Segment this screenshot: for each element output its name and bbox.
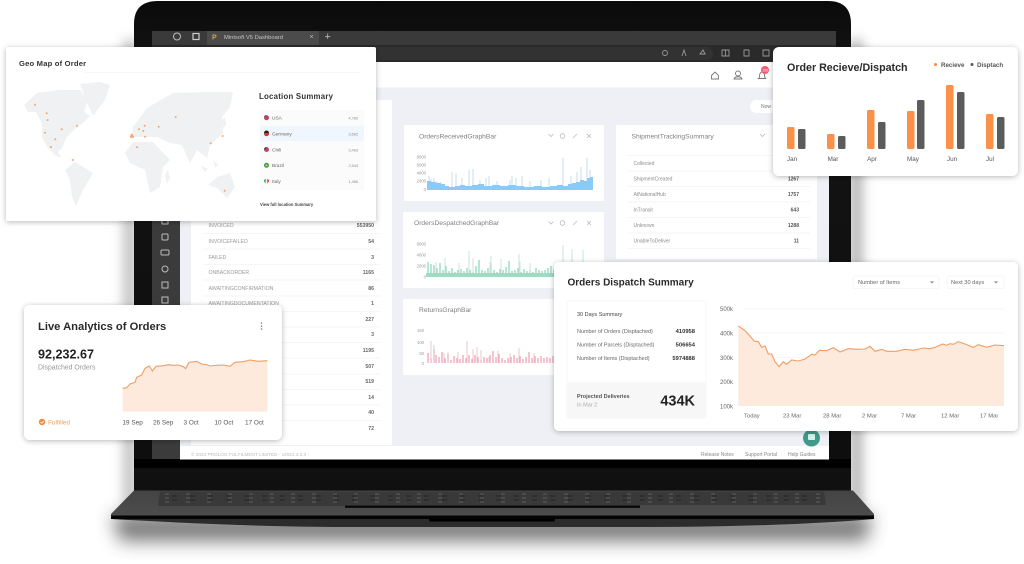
area chart: live orders: 26 Sep (153, 420, 174, 426)
line chart: dispatch forecast: 2 Mar (862, 414, 877, 420)
browser window (152, 31, 836, 460)
bar chart: orders received (427, 158, 593, 190)
area chart: live orders: 19 Sep (122, 420, 143, 426)
panel: order status table: AWAITINGDOCUMENTATION (208, 301, 279, 307)
laptop shadow (112, 40, 872, 541)
line chart: dispatch forecast: 17 Mar (980, 414, 998, 420)
summary box: Number of Parcels (Disptached) (577, 342, 655, 348)
footer: Support Portal (745, 452, 777, 458)
panel: order status table: INVOICEFAILED (208, 239, 248, 245)
bar chart: receive vs dispatch: Apr (867, 156, 877, 163)
icon: chat button (803, 430, 820, 446)
line chart: dispatch forecast (720, 307, 1004, 420)
browser tab bar: × (310, 34, 314, 41)
location summary (259, 92, 364, 207)
panel: Geo Map of Order (6, 47, 376, 221)
date pill (750, 100, 790, 113)
heading: orders dispatch summary: Orders Dispatch Summary (568, 278, 694, 288)
panel: OrdersReceivedGraphBar (404, 125, 604, 201)
line chart: dispatch forecast: 28 Mar (823, 414, 841, 420)
panel: order status table: 54 (368, 239, 374, 245)
line chart: dispatch forecast: 12 Mar (941, 414, 959, 420)
area chart: live orders: 3 Oct (184, 420, 199, 426)
summary box: Projected Deliveries (577, 394, 630, 400)
location summary: 3,592 (348, 132, 358, 136)
bar chart: receive vs dispatch (787, 85, 1004, 163)
browser tab bar: + (324, 31, 331, 43)
panel: ShipmentTrackingSummary: ShipmentCreated (634, 176, 673, 182)
line chart: dispatch forecast: 300k (720, 356, 734, 362)
panel: ShipmentTrackingSummary: InTransit (634, 208, 653, 214)
panel: order status table: ONBACKORDER (208, 270, 249, 276)
heading: geo map: Geo Map of Order (19, 59, 86, 68)
location summary: USA (272, 116, 283, 122)
location summary: 3,493 (348, 148, 358, 152)
panel: order status table: 519 (365, 379, 374, 385)
dropdown: next 30 days (947, 276, 1004, 288)
panel: order status table: INVOICED (208, 223, 234, 229)
footer (180, 446, 829, 460)
summary box: In Mar 2 (577, 402, 597, 408)
icon: home (712, 72, 718, 79)
panel: order status table: 507 (365, 364, 374, 370)
panel: Live Analytics of Orders (24, 305, 282, 440)
panel: order status table: 3 (371, 255, 374, 261)
bar chart: receive vs dispatch: Mar (828, 156, 838, 163)
browser tab bar: P (212, 34, 217, 42)
panel: ReturnsGraphBar: 150 (417, 328, 425, 333)
laptop (111, 1, 874, 541)
summary box: Number of Orders (Disptached) (577, 329, 653, 335)
dropdown: number of items (853, 276, 939, 288)
panel: OrdersReceivedGraphBar: 8000 (417, 154, 427, 160)
content background (180, 87, 829, 446)
panel: order status table: 40 (368, 410, 374, 416)
line chart: dispatch forecast: Today (744, 414, 760, 420)
laptop base deck (111, 490, 874, 527)
bar chart: receive vs dispatch: Jul (986, 156, 994, 163)
line chart: dispatch forecast: 100k (720, 404, 734, 410)
panel: ReturnsGraphBar: 50 (419, 351, 425, 356)
panel: order status table: AWAITINGCONFIRMATION (208, 286, 274, 292)
summary box (567, 301, 706, 418)
panel: OrdersDespatchedGraphBar: 4000 (417, 252, 427, 258)
panel: ShipmentTrackingSummary: 643 (791, 208, 799, 214)
panel: order status table: 86 (368, 286, 374, 292)
footer: Help Guides (788, 452, 816, 458)
panel: ShipmentTrackingSummary: UnableToDeliver (634, 238, 671, 244)
icon: bell with badge: 100 (762, 68, 768, 72)
panel: OrdersReceivedGraphBar: 2000 (417, 178, 427, 184)
icon: menu dots (261, 322, 262, 330)
icon: bell with badge (758, 66, 769, 78)
panel: order status table: 3 (371, 332, 374, 338)
location summary: Germany (272, 132, 292, 138)
panel: OrdersReceivedGraphBar: 4000 (417, 170, 427, 176)
icon: user (734, 71, 742, 79)
heading: order recieve dispatch: Order Recieve/Dispatch (787, 62, 908, 74)
panel: ShipmentTrackingSummary: Unknown (634, 223, 655, 229)
footer: © 2024 PROLOG FULFILMENT LIMITED - v2024.4.2.3 (191, 451, 307, 457)
panel: order status table: 1165 (363, 270, 374, 276)
location summary: 2,543 (348, 164, 358, 168)
metric: dispatched orders: Dispatched Orders (38, 364, 96, 372)
area chart: live orders: 17 Oct (245, 420, 264, 426)
app sidebar (152, 62, 180, 459)
bar chart: receive vs dispatch: Jan (787, 156, 798, 163)
panel: Orders Dispatch Summary (554, 262, 1018, 431)
location summary: Chili (272, 148, 281, 154)
line chart: dispatch forecast: 500k (720, 307, 734, 313)
legend (934, 62, 1003, 69)
panel: ReturnsGraphBar (403, 299, 563, 375)
panel: OrdersReceivedGraphBar: OrdersReceivedGraphBar (419, 134, 497, 140)
metric: dispatched orders (38, 348, 96, 372)
panel: ShipmentTrackingSummary: 1757 (788, 192, 799, 198)
panel: ShipmentTrackingSummary: AtNationalHub (634, 192, 666, 198)
summary box: 30 Days Summary (577, 312, 622, 318)
line chart: dispatch forecast: 7 Mar (901, 414, 916, 420)
location summary: Italy (272, 179, 281, 185)
footer: Release Notes (701, 452, 734, 458)
dropdown: number of items: Number of Items (858, 280, 900, 286)
panel: order status table: 1 (371, 301, 374, 307)
panel: ShipmentTrackingSummary: ShipmentTrackingSummary (632, 134, 714, 140)
dropdown: next 30 days: Next 30 days (951, 280, 984, 286)
panel: ReturnsGraphBar: 100 (417, 340, 425, 345)
panel: ShipmentTrackingSummary: 11 (794, 238, 799, 244)
location summary: 1,456 (348, 180, 358, 184)
panel: OrdersDespatchedGraphBar: 2000 (417, 264, 427, 268)
location summary: 4,789 (348, 116, 358, 120)
area chart: live orders (122, 360, 267, 426)
panel: order status table: 1195 (363, 348, 374, 354)
panel: OrdersReceivedGraphBar: 0 (424, 187, 427, 192)
heading: live analytics: Live Analytics of Orders (38, 321, 166, 333)
summary box: 5974888 (672, 356, 696, 362)
bar chart: receive vs dispatch: Jun (947, 156, 958, 163)
panel: order status table: 72 (368, 426, 374, 432)
summary box: Number of Items (Disptached) (577, 356, 650, 362)
panel: OrdersDespatchedGraphBar: 0 (424, 274, 427, 280)
area chart: live orders: 10 Oct (214, 420, 234, 426)
world map (24, 82, 235, 206)
panel: OrdersDespatchedGraphBar (403, 212, 604, 288)
panel: ShipmentTrackingSummary: 1288 (788, 223, 799, 229)
laptop lid bezel (134, 1, 851, 494)
bar chart: orders despatched (426, 245, 584, 277)
browser toolbar (152, 45, 836, 62)
panel: OrdersReceivedGraphBar: 6000 (417, 162, 427, 168)
panel: order status table: 553950 (357, 223, 374, 229)
line chart: dispatch forecast: 400k (720, 332, 734, 338)
browser tab bar (152, 31, 836, 45)
panel: ReturnsGraphBar: ReturnsGraphBar (419, 307, 472, 314)
summary box: 410958 (676, 329, 696, 335)
legend: Recieve (941, 62, 965, 69)
panel: order status table: 14 (368, 395, 374, 401)
bar chart: returns (428, 341, 553, 363)
location summary: Brazil (272, 163, 284, 169)
status: fulfilled (39, 419, 70, 426)
panel: OrdersDespatchedGraphBar: OrdersDespatchedGraphBar (414, 220, 500, 227)
panel: ShipmentTrackingSummary (616, 125, 817, 259)
panel: ShipmentTrackingSummary: Collected (634, 161, 655, 167)
panel: order status table: 227 (365, 317, 374, 323)
metric: dispatched orders: 92,232.67 (38, 348, 94, 362)
summary box: 506654 (676, 342, 696, 348)
line chart: dispatch forecast: 200k (720, 380, 734, 386)
date pill: Now 1 (761, 104, 775, 110)
summary box: 434K (660, 394, 696, 410)
line chart: dispatch forecast: 23 Mar (783, 414, 801, 420)
legend: Disptach (977, 62, 1003, 69)
status: fulfilled: Fulfilled (48, 420, 70, 426)
panel: OrdersDespatchedGraphBar: 6000 (417, 242, 427, 246)
panel: order status table: FAILED (208, 255, 227, 261)
panel: order status table (191, 100, 392, 445)
bar chart: receive vs dispatch: May (907, 156, 920, 163)
panel: Order Recieve/Dispatch (773, 47, 1018, 176)
app header (180, 62, 829, 88)
location summary: View full location Summary (260, 202, 314, 207)
panel: ShipmentTrackingSummary: 1267 (788, 176, 799, 182)
browser tab bar: Mintsoft V5 Dashboard (224, 35, 283, 41)
heading: location summary: Location Summary (259, 92, 334, 101)
panel: ReturnsGraphBar: 0 (422, 361, 425, 366)
